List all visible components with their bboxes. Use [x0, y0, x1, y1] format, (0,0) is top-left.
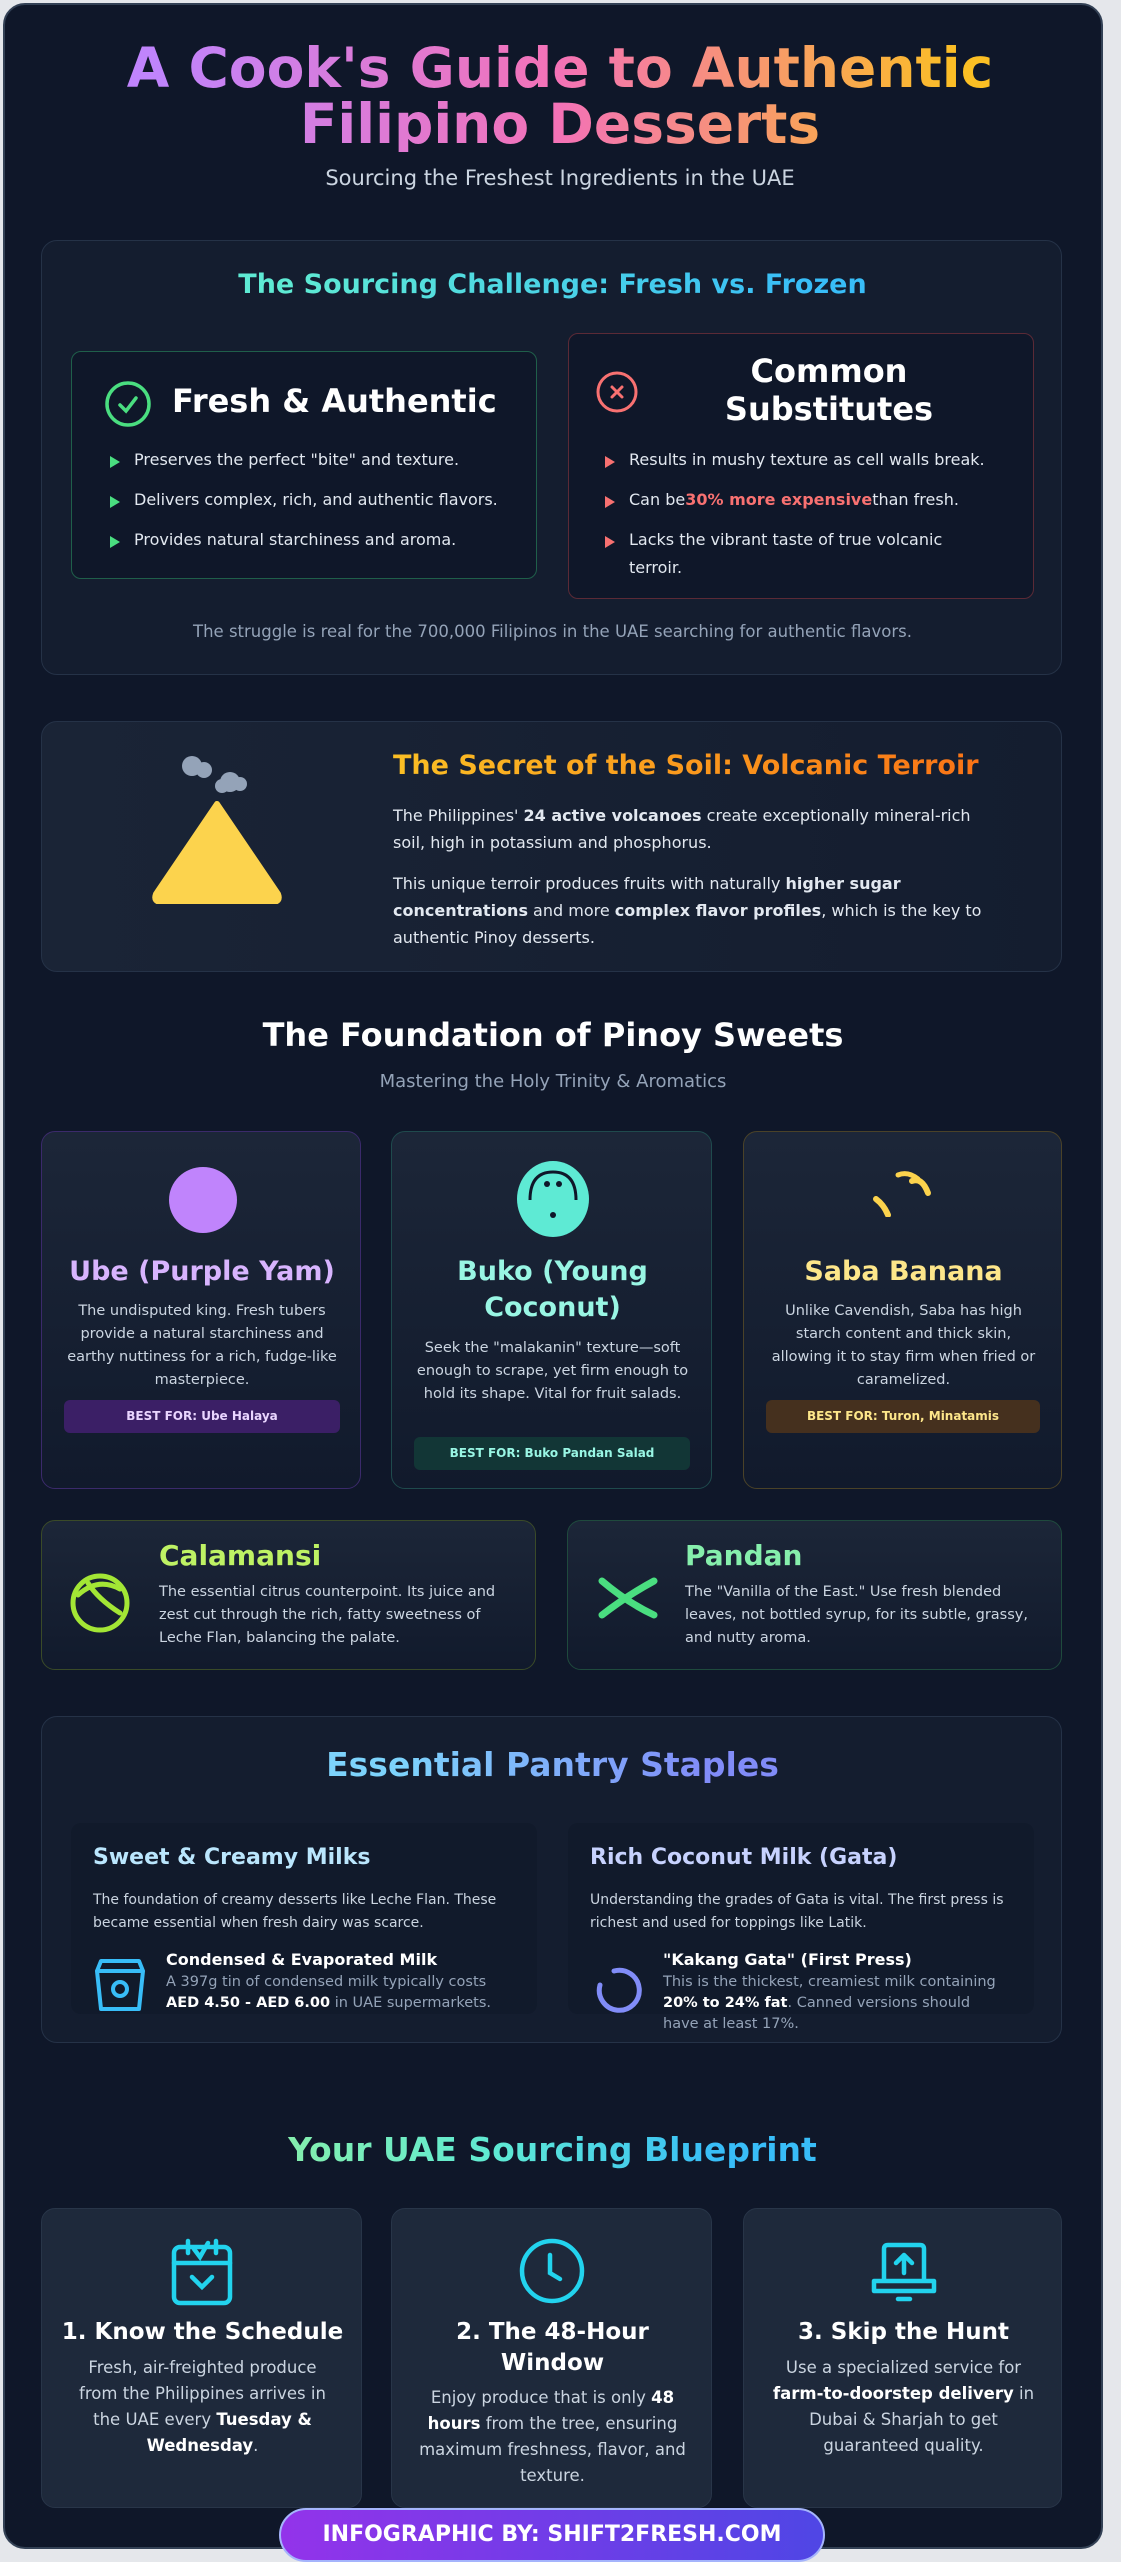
tag: BEST FOR: Ube Halaya: [126, 1409, 278, 1423]
footnote: The struggle is real for the 700,000 Filipinos in the UAE searching for authentic flavors.: [193, 622, 912, 641]
card: ube: [41, 1131, 361, 1489]
heading substitutes: Substitutes: [725, 390, 933, 428]
title: A Cook's Guide to Authentic: [127, 36, 993, 100]
card: ube: Ube (Purple Yam): [69, 1256, 335, 1287]
heading: foundation: The Foundation of Pinoy Sweets: [263, 1016, 843, 1054]
list: Lacks the vibrant taste of true volcanic terroir.: [629, 530, 942, 577]
tag: [414, 1437, 690, 1470]
heading: Pandan: [685, 1539, 802, 1572]
icon: banana: [873, 1171, 931, 1217]
list: Provides natural starchiness and aroma.: [134, 530, 456, 549]
icon: ube: [169, 1167, 237, 1233]
footer badge: [279, 2508, 825, 2562]
box: milks: A 397g tin of condensed milk typically costs AED 4.50 - AED 6.00 in UAE supermarkets.: [166, 1974, 491, 2011]
panel: sourcing challenge: [41, 240, 1062, 675]
box: gata: Understanding the grades of Gata is vital. The first press is richest and used for toppings like Latik.: [590, 1892, 1004, 1931]
card: buko: Buko (Young: [457, 1256, 648, 1287]
box: milks: The foundation of creamy desserts like Leche Flan. These became essential when fresh dairy was scarce.: [93, 1892, 496, 1931]
card: saba: Saba Banana: [804, 1256, 1003, 1287]
box: gata: [568, 1823, 1034, 2014]
heading: blueprint: Your UAE Sourcing Blueprint: [288, 2130, 817, 2169]
card: schedule: [41, 2208, 362, 2508]
card: 48-hour: Enjoy produce that is only 48 hours from the tree, ensuring maximum freshness, flavor, and texture.: [419, 2388, 686, 2485]
card: skip the hunt: [743, 2208, 1062, 2508]
card: buko: [391, 1131, 712, 1489]
list: Results in mushy texture as cell walls break.: [629, 450, 985, 469]
box: milks: [71, 1823, 537, 2014]
card: schedule: Fresh, air-freighted produce from the Philippines arrives in the UAE every Tuesday & Wednesday.: [79, 2358, 326, 2455]
box: fresh: [71, 351, 537, 579]
card: buko: Coconut): [484, 1292, 621, 1323]
card: saba: [743, 1131, 1062, 1489]
card: 48-hour: 2. The 48-Hour: [456, 2319, 649, 2345]
heading: Essential Pantry Staples: [326, 1745, 779, 1784]
icon: volcano: [152, 756, 282, 904]
list: [605, 450, 985, 577]
tag: BEST FOR: Buko Pandan Salad: [450, 1446, 654, 1460]
text: [392, 806, 981, 947]
card: pandan: [567, 1520, 1062, 1670]
card: buko: Seek the "malakanin" texture—soft enough to scrape, yet firm enough to hold its shape. Vital for fruit salads.: [417, 1340, 688, 1402]
card: 48-hour: Window: [501, 2350, 604, 2376]
list: [110, 450, 498, 549]
heading: The Secret of the Soil: Volcanic Terroir: [393, 750, 979, 781]
icon: x: [596, 372, 638, 412]
panel: volcanic terroir: [41, 721, 1062, 972]
panel: pantry staples: [41, 1716, 1062, 2043]
list: Preserves the perfect "bite" and texture.: [134, 450, 459, 469]
card: saba: Unlike Cavendish, Saba has high starch content and thick skin, allowing it to stay firm when fried or caramelized.: [772, 1303, 1035, 1388]
icon: ring: [596, 1968, 642, 2013]
box: milks: Condensed & Evaporated Milk: [166, 1950, 437, 1969]
card: skip the hunt: Use a specialized service for farm-to-doorstep delivery in Dubai & Sharjah to get guaranteed quality.: [773, 2358, 1034, 2455]
heading: [42, 1745, 1063, 1784]
text: The "Vanilla of the East." Use fresh blended leaves, not bottled syrup, for its subtle, grassy, and nutty aroma.: [685, 1584, 1028, 1646]
icon: calendar: [172, 2238, 232, 2306]
tag: BEST FOR: Turon, Minatamis: [807, 1409, 999, 1423]
box: milks: Sweet & Creamy Milks: [93, 1845, 370, 1870]
list: Can be30% more expensivethan fresh.: [629, 490, 959, 509]
tag: [64, 1400, 340, 1433]
title: Filipino Desserts: [300, 92, 820, 156]
card: 48-hour: [391, 2208, 712, 2508]
footer badge: INFOGRAPHIC BY: SHIFT2FRESH.COM: [322, 2522, 782, 2547]
card: schedule: 1. Know the Schedule: [62, 2319, 343, 2345]
heading: The Sourcing Challenge: Fresh vs. Frozen: [238, 269, 867, 300]
heading: Calamansi: [159, 1539, 321, 1572]
icon: tin: [95, 1959, 146, 2011]
icon: coconut: [517, 1161, 589, 1237]
heading substitutes: Common: [751, 352, 907, 390]
icon: calamansi: [70, 1574, 130, 1632]
card: ube: The undisputed king. Fresh tubers provide a natural starchiness and earthy nuttiness for a rich, fudge-like masterpiece.: [67, 1303, 337, 1388]
tag: [766, 1400, 1040, 1433]
icon: clock: [520, 2238, 584, 2304]
subtitle: Sourcing the Freshest Ingredients in the UAE: [325, 166, 795, 190]
heading substitutes: [725, 352, 933, 428]
box: substitutes: [568, 333, 1034, 599]
list: Delivers complex, rich, and authentic flavors.: [134, 490, 498, 509]
heading fresh: Fresh & Authentic: [172, 382, 497, 420]
card: skip the hunt: 3. Skip the Hunt: [798, 2319, 1009, 2345]
text: The Philippines' 24 active volcanoes create exceptionally mineral-rich soil, high in potassium and phosphorus.: [393, 806, 971, 852]
box: gata: This is the thickest, creamiest milk containing 20% to 24% fat. Canned versions should have at least 17%.: [663, 1974, 996, 2032]
heading: [42, 269, 1063, 300]
icon: delivery: [872, 2242, 936, 2302]
title: [60, 40, 1060, 152]
box: gata: "Kakang Gata" (First Press): [663, 1950, 912, 1969]
text: The essential citrus counterpoint. Its juice and zest cut through the rich, fatty sweetness of Leche Flan, balancing the palate.: [159, 1584, 495, 1646]
card: calamansi: [41, 1520, 536, 1670]
subheading: Mastering the Holy Trinity & Aromatics: [380, 1071, 726, 1092]
icon: check: [105, 381, 151, 427]
box: gata: Rich Coconut Milk (Gata): [590, 1845, 897, 1870]
icon: pandan: [598, 1578, 658, 1618]
text: This unique terroir produces fruits with naturally higher sugar concentrations and more complex flavor profiles, which is the key to authentic Pinoy desserts.: [393, 874, 981, 947]
